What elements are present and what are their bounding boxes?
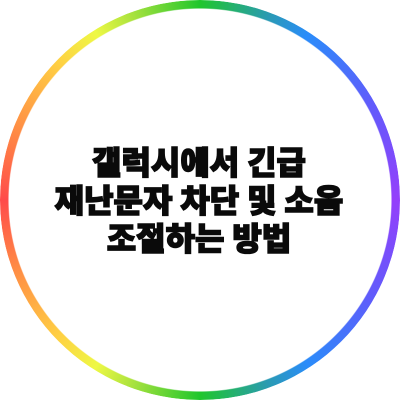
title: 조절하는 방법 xyxy=(107,221,291,257)
title: 갤럭시에서 긴급 xyxy=(92,145,306,181)
title xyxy=(54,145,343,257)
title: 재난문자 차단 및 소음 xyxy=(55,183,343,219)
